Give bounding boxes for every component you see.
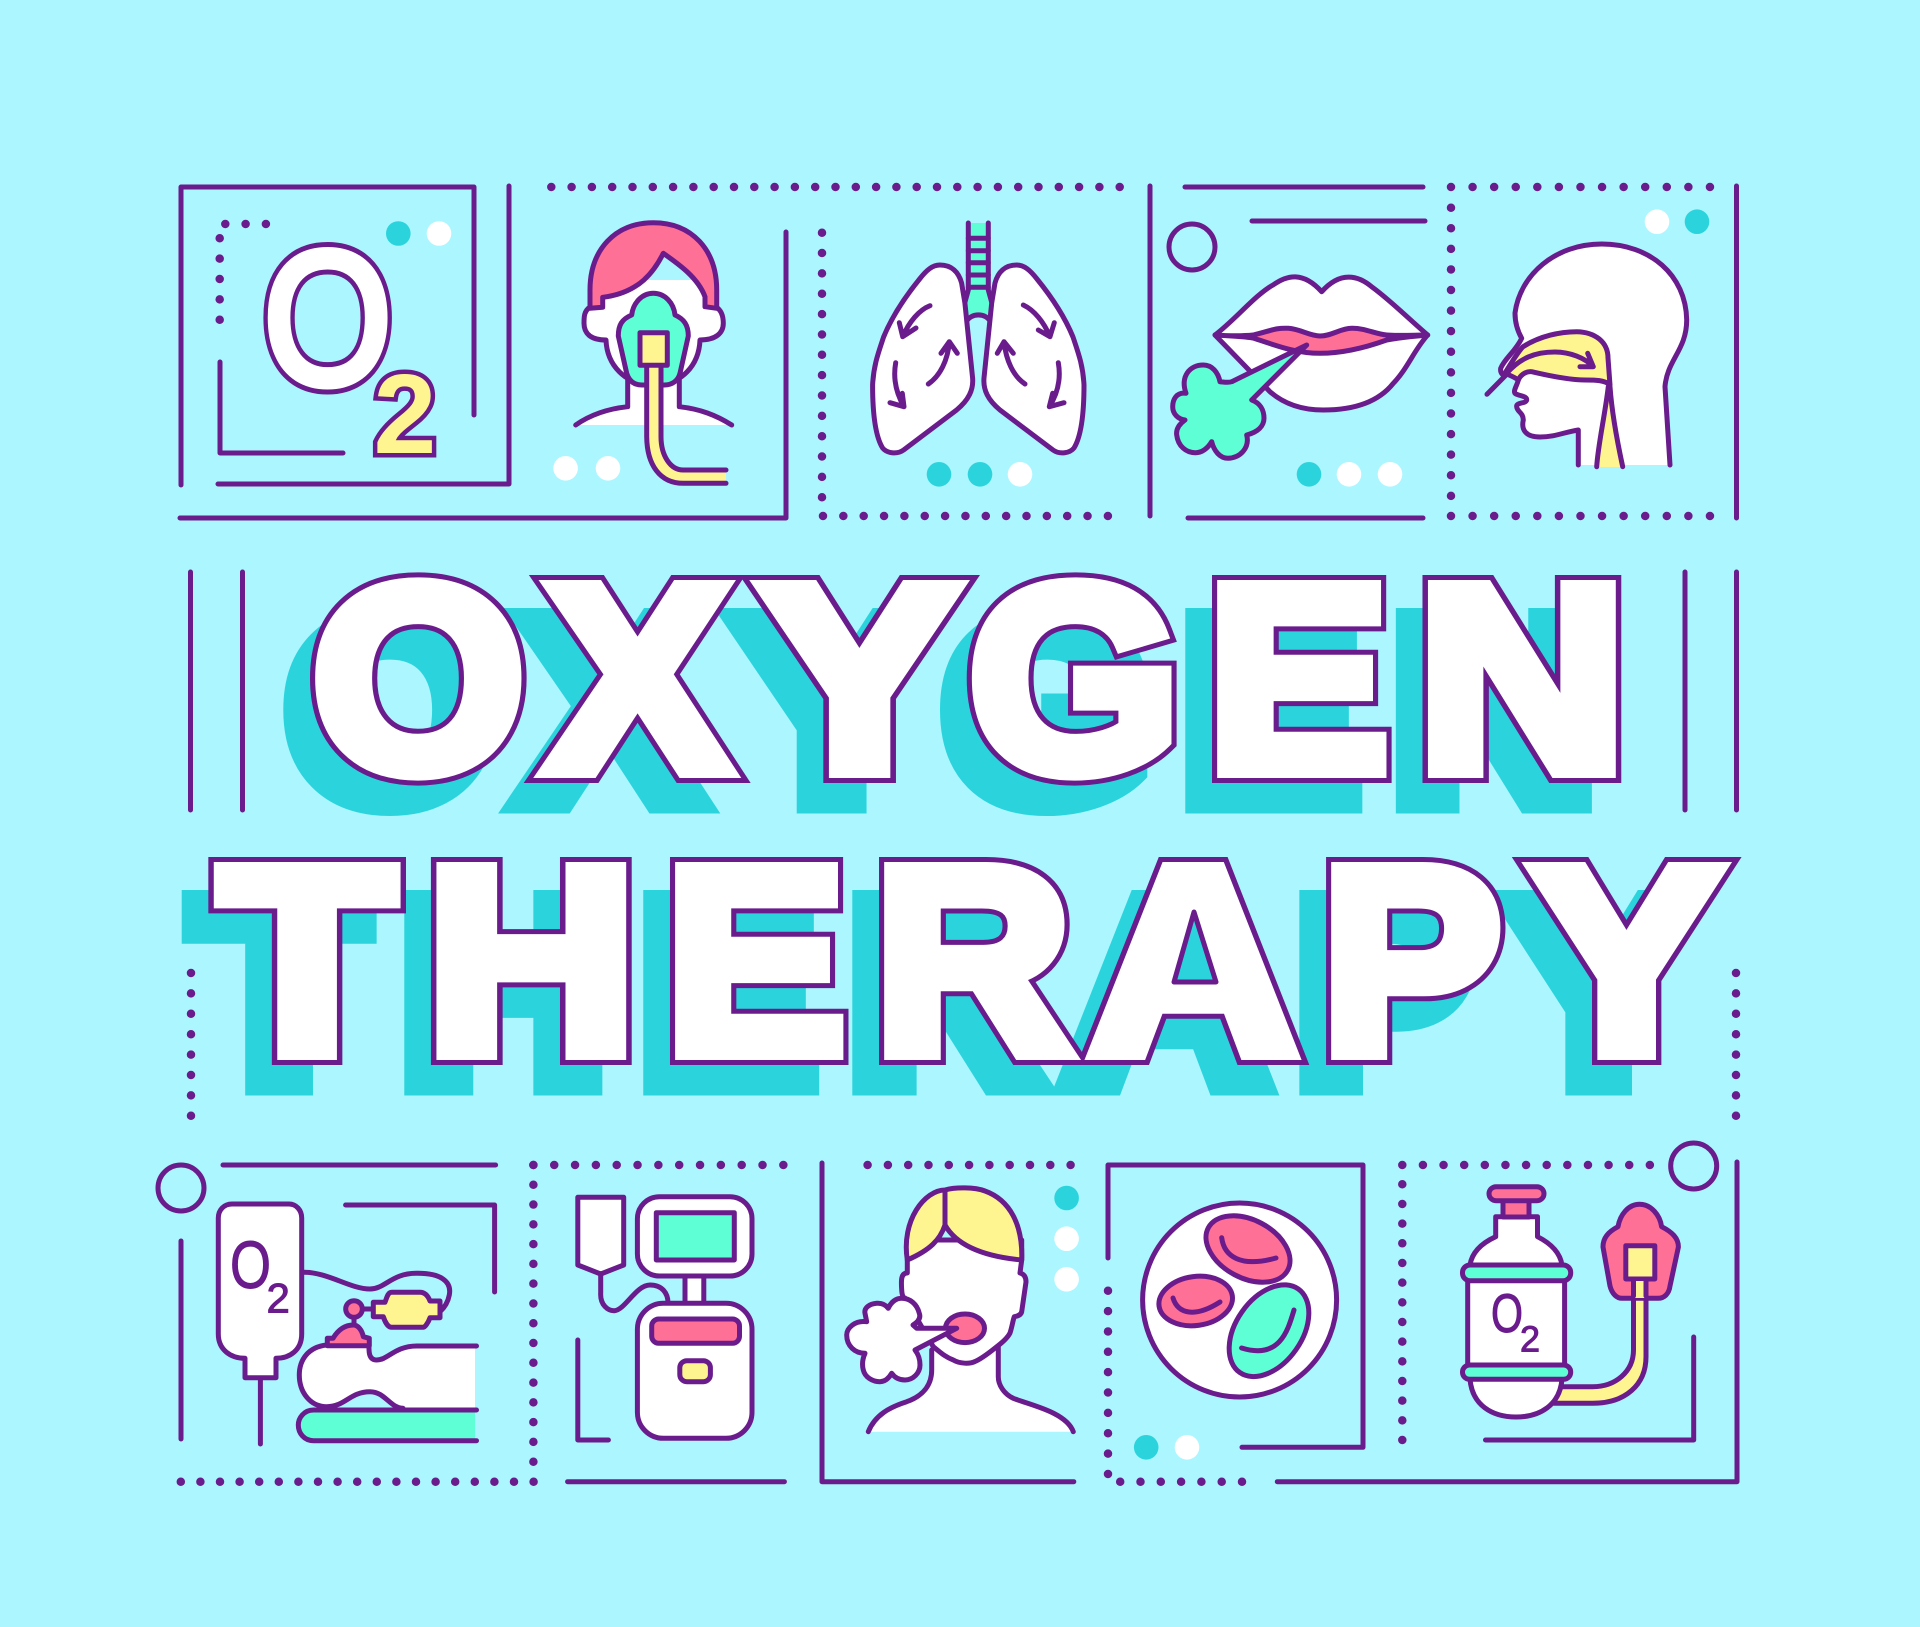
stem [685,1270,704,1308]
head fill [584,280,723,385]
letter A counter [1174,912,1216,982]
icon: person wearing oxygen mask [576,223,732,483]
icon: O2 symbol: 2 [374,351,436,477]
therapy shadow: R [847,845,1043,1139]
therapy fill: H [426,814,636,1108]
mask [618,293,688,385]
throat [1597,385,1623,467]
oxygen fill: G [970,532,1180,826]
icon: O2 symbol: O [263,213,392,425]
right lung airflow arrows [1023,305,1054,337]
icon: O2 symbol [263,213,436,477]
resuscitator bag [373,1292,440,1327]
oxygen stroke: G [970,532,1180,826]
therapy shadow: Y [1505,845,1692,1139]
therapy stroke: A [1090,814,1296,1108]
therapy fill: A [1090,814,1296,1108]
oxygen fill: O [313,532,524,826]
oxygen stroke: O [313,532,524,826]
oxygen shadow: Y [733,563,930,857]
face mask [327,1325,369,1346]
patient [299,1345,475,1408]
left lung [873,265,973,453]
yellow tube [1554,1283,1646,1403]
oxygen shadow: N [1390,563,1598,857]
bag label: 2 [266,1274,290,1321]
left lung airflow arrows [899,306,930,337]
airflow arrow [1507,352,1593,373]
oxygen fill: X [547,532,729,826]
icon: oxygen cylinder with mask [1462,1187,1678,1417]
drip line [258,1378,263,1444]
oxygen stroke: N [1418,532,1626,826]
hair [906,1188,1022,1260]
oxygen shadow: O [285,563,496,857]
head outline [584,307,723,385]
lips [1215,277,1428,410]
mattress [298,1410,475,1441]
iv line [601,1274,668,1311]
face [901,1240,1026,1363]
oxygen fill: N [1418,532,1626,826]
tube [647,366,726,483]
top decorative frames [180,186,1736,518]
monitor [637,1197,752,1276]
trachea [965,223,991,318]
icon: head with nasal airway [1487,244,1687,467]
cannula line [1487,375,1506,394]
therapy fill: Y [1533,814,1720,1108]
icon: O2 symbol: O [263,213,392,425]
therapy shadow: A [1062,845,1268,1139]
cylinder label: 2 [1520,1319,1540,1360]
icon: lungs [873,223,1084,453]
icon: woman exhaling [847,1188,1073,1432]
therapy fill: T [220,814,394,1108]
oxygen bag [218,1204,302,1378]
cylinder bottom [1470,1379,1562,1417]
cell 1 [1195,1202,1301,1296]
breath cloud [847,1298,957,1382]
therapy stroke: Y [1533,814,1720,1108]
cylinder neck and shoulder [1470,1217,1562,1265]
hair [590,223,717,308]
bands [1462,1265,1571,1281]
cell 3 [1213,1270,1325,1391]
therapy shadow: H [398,845,608,1139]
hose [303,1272,450,1312]
cell 2 [1156,1272,1236,1330]
right lung [984,265,1084,453]
shoulders and neck [576,375,732,425]
bag label: O [230,1228,271,1303]
therapy fill: E [666,814,845,1108]
neck and shoulders [868,1340,1073,1432]
icon: lips exhaling breath [1173,277,1428,458]
mask [1603,1204,1678,1298]
base unit [637,1303,752,1438]
open mouth [946,1314,984,1343]
iv bag [578,1197,624,1274]
oxygen shadow: X [519,563,701,857]
icon: blood cells [1143,1202,1337,1397]
title: OXYGEN [285,532,1626,857]
oxygen shadow: E [1180,563,1360,857]
head silhouette [1501,244,1687,465]
valve [1503,1198,1529,1217]
therapy fill: R [875,814,1071,1108]
bottom decorative frames [158,1143,1737,1482]
therapy shadow: P [1294,845,1473,1139]
oxygen fill: E [1208,532,1388,826]
therapy shadow: T [192,845,366,1139]
oxygen fill: Y [761,532,958,826]
therapy fill: P [1322,814,1501,1108]
therapy stroke: R [875,814,1071,1108]
therapy stroke: E [666,814,845,1108]
therapy shadow: E [638,845,817,1139]
title side rules and dots [190,572,1736,1118]
oxygen stroke: X [547,532,729,826]
oxygen stroke: E [1208,532,1388,826]
oxygen shadow: G [942,563,1152,857]
cylinder body [1468,1278,1565,1366]
icon: oxygen bag with patient [218,1204,477,1444]
cylinder label: O [1491,1282,1523,1344]
icon: ventilator machine [578,1197,752,1438]
valve [640,333,667,365]
nasal cavity [1505,332,1610,385]
therapy stroke: P [1322,814,1501,1108]
therapy stroke: T [220,814,394,1108]
therapy stroke: H [426,814,636,1108]
oxygen stroke: Y [761,532,958,826]
title: THERAPY [192,814,1720,1139]
icon: O2 symbol: 2 [374,351,436,477]
breath cloud [1173,345,1307,458]
